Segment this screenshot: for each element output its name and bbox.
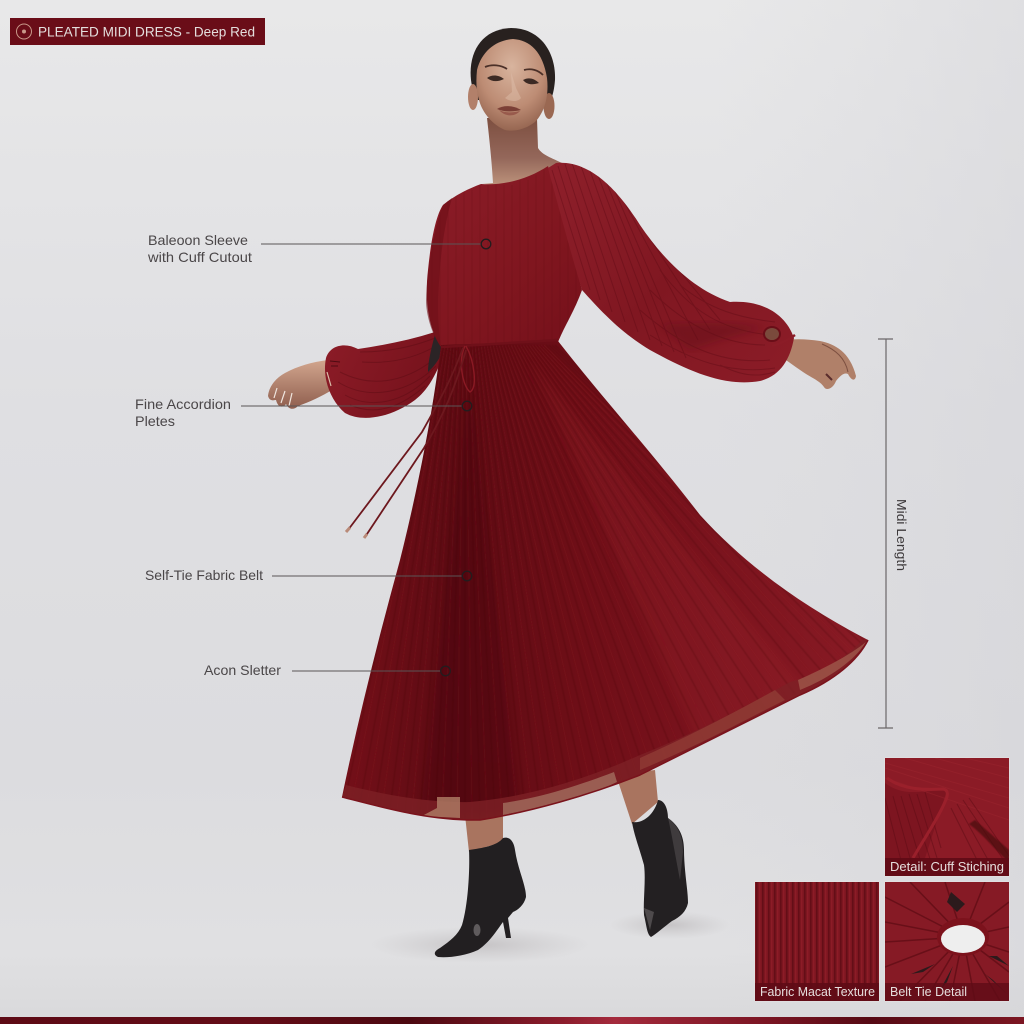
callout: fabric belt xyxy=(145,567,472,583)
floor shadow xyxy=(370,911,730,963)
callout: acon sletter: Acon Sletter xyxy=(204,662,281,678)
skirt pleat lines xyxy=(345,345,868,820)
dark inner gap xyxy=(428,327,445,372)
callout: accordion pleats xyxy=(135,396,472,429)
midi length measure xyxy=(878,339,909,728)
ankle boots xyxy=(435,800,688,957)
bodice xyxy=(426,166,582,347)
bottom fabric band xyxy=(0,1017,1024,1024)
self-tie belt with hanging strings xyxy=(346,340,558,538)
title badge xyxy=(10,18,265,45)
neck xyxy=(482,118,562,184)
left balloon sleeve xyxy=(325,332,445,418)
callout: balloon sleeve xyxy=(147,232,491,265)
callout: accordion pleats: Fine Accordion xyxy=(135,396,231,412)
callout: balloon sleeve: Baleoon Sleeve xyxy=(148,232,248,248)
callout: acon sletter xyxy=(204,662,450,678)
hair xyxy=(471,28,555,106)
right balloon sleeve xyxy=(548,163,795,382)
title badge: PLEATED MIDI DRESS - Deep Red xyxy=(38,24,255,40)
inset: belt tie detail: Belt Tie Detail xyxy=(890,985,967,999)
inset: cuff stitching xyxy=(884,758,1010,876)
inset: cuff stitching: Detail: Cuff Stiching xyxy=(890,860,1004,874)
legs xyxy=(465,770,658,852)
callout: accordion pleats: Pletes xyxy=(135,413,175,429)
inset: fabric texture xyxy=(754,882,880,1002)
pleated skirt xyxy=(342,341,868,820)
left hand xyxy=(268,360,332,409)
inset: belt tie detail xyxy=(884,882,1010,1002)
icon: target circle xyxy=(16,24,32,39)
midi length measure: Midi Length xyxy=(894,499,909,571)
right hand xyxy=(776,339,856,389)
head xyxy=(468,39,554,131)
model figure wearing pleated midi dress xyxy=(268,28,868,957)
callout: fabric belt: Self-Tie Fabric Belt xyxy=(145,567,263,583)
inset: fabric texture: Fabric Macat Texture xyxy=(760,985,875,999)
sheer hem band xyxy=(342,640,868,820)
callout: balloon sleeve: with Cuff Cutout xyxy=(147,249,252,265)
